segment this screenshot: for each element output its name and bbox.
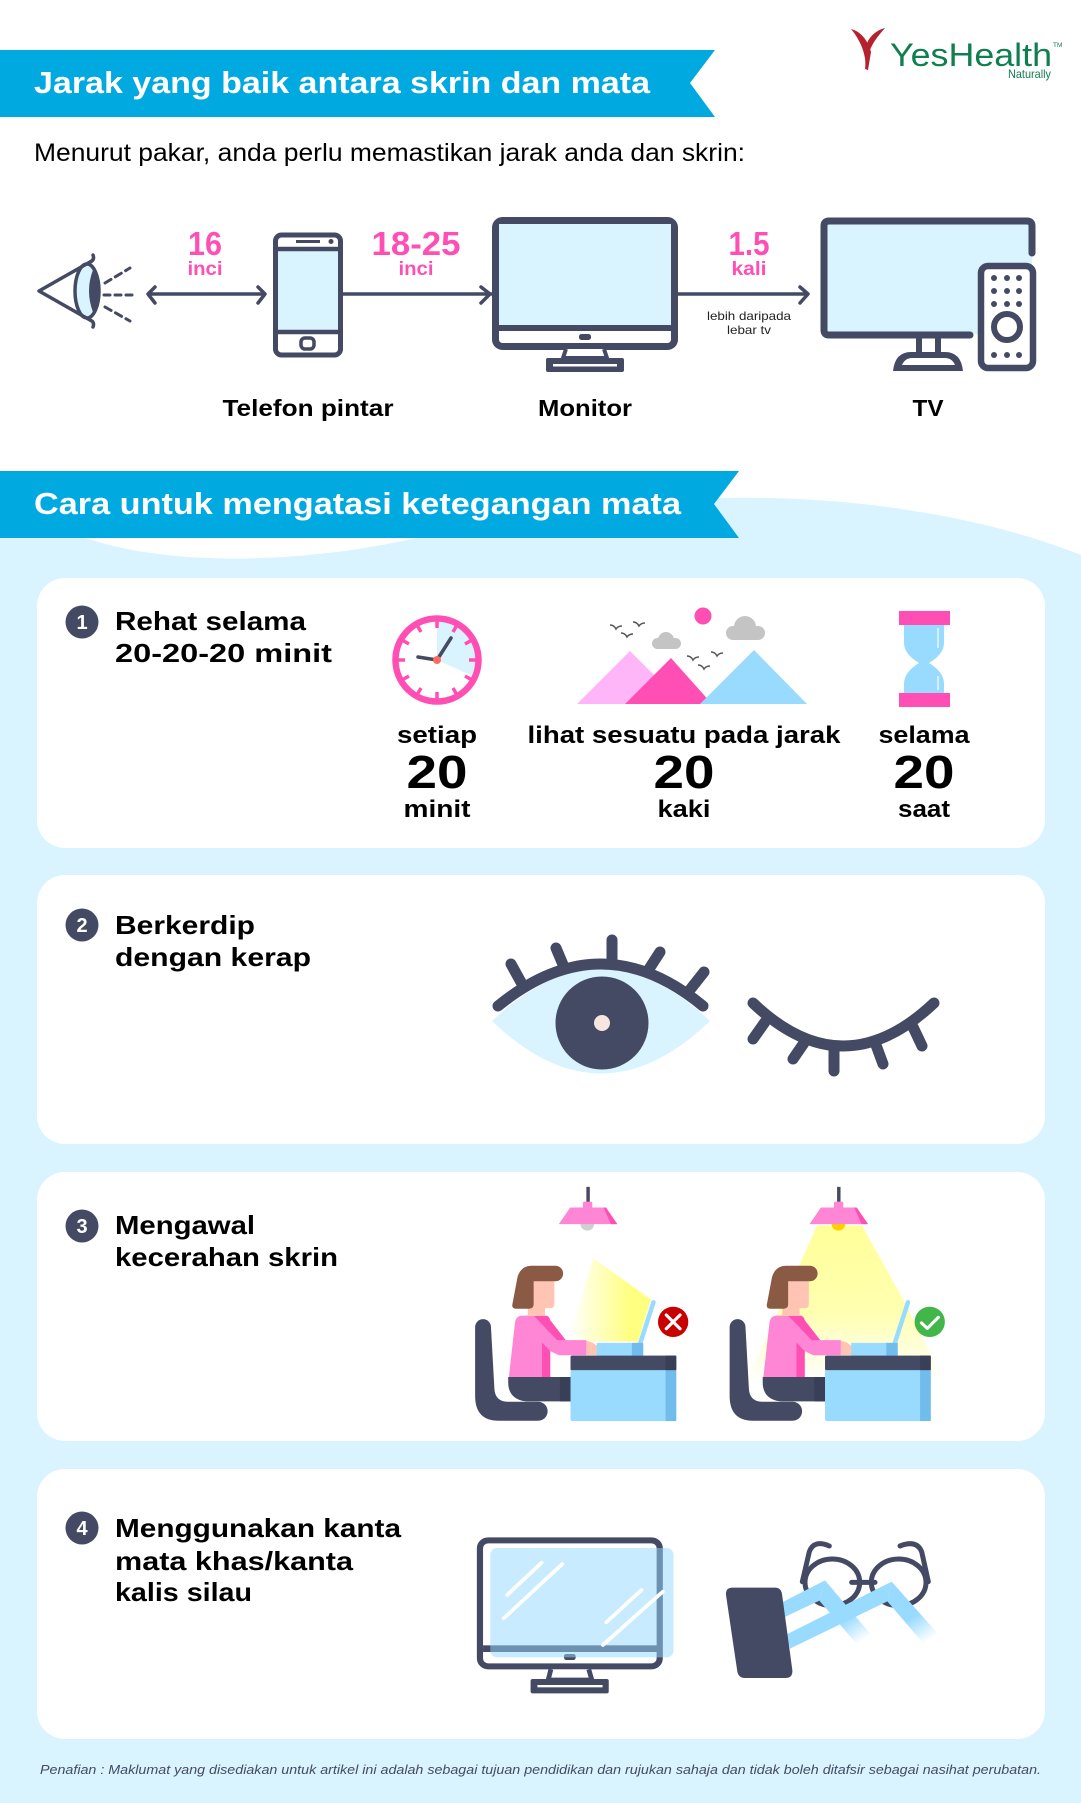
text: for 20 seconds (878, 722, 970, 823)
figure: person at desk (730, 1266, 856, 1421)
number badge 3 (66, 1210, 98, 1242)
number badge 1 (66, 606, 98, 638)
number badge 2: 2 (76, 915, 88, 937)
text: for 20 seconds: 20 (894, 746, 954, 798)
icon: closed eye (753, 1003, 934, 1071)
label: TV: TV (912, 395, 944, 421)
heading: tip 2: Berkerdip (115, 910, 255, 940)
illustration: glasses (726, 1544, 939, 1678)
label: 1.5 kali: 1.5 (728, 225, 770, 262)
heading: tip 1: 20-20-20 minit (115, 638, 332, 668)
banner: section 1 heading: Jarak yang baik antara skrin dan mata (34, 65, 651, 100)
illustration: correct lighting (730, 1187, 945, 1421)
text: for 20 seconds: saat (898, 796, 950, 823)
text: every 20 minutes: minit (404, 796, 471, 823)
banner: section 1 heading (0, 50, 715, 117)
heading: tip 4: Menggunakan kanta (115, 1513, 402, 1543)
note: wider than TV: lebar tv (727, 323, 771, 337)
label: 16 inci: 16 (188, 225, 222, 262)
panel: tip 1 (37, 578, 1045, 848)
icon: lamp on (810, 1187, 868, 1231)
icon: clock (396, 618, 479, 702)
heading: tip 2: dengan kerap (115, 942, 311, 972)
icon: phone (275, 235, 341, 355)
heading: tip 2 (115, 910, 311, 972)
background wave (0, 498, 1081, 1803)
text: look 20 feet away: lihat sesuatu pada jarak (528, 722, 841, 749)
heading: tip 4: mata khas/kanta (115, 1546, 354, 1576)
text: every 20 minutes: 20 (406, 746, 468, 798)
label: 16 inci (188, 225, 222, 280)
heading: tip 1: Rehat selama (115, 606, 307, 636)
icon: red leaves (851, 28, 885, 70)
number badge 3: 3 (76, 1216, 88, 1238)
panel: tip 3 (37, 1172, 1045, 1441)
icon: lamp off (559, 1187, 617, 1231)
icon: side eye (39, 255, 135, 327)
label: smartphone: Telefon pintar (222, 395, 394, 421)
icon: remote control (981, 266, 1033, 368)
text: for 20 seconds: selama (878, 722, 970, 749)
heading: tip 4 (115, 1513, 402, 1607)
figure: person at desk (475, 1266, 602, 1421)
number badge 1: 1 (76, 612, 88, 634)
heading: tip 3: kecerahan skrin (115, 1242, 338, 1272)
number badge 2 (66, 908, 98, 942)
disclaimer: Penafian : Maklumat yang disediakan untuk artikel ini adalah sebagai tujuan pendidikan dan rujukan sahaja dan tidak boleh ditafsir sebagai nasihat perubatan. (40, 1762, 1041, 1777)
banner: section 2 heading: Cara untuk mengatasi ketegangan mata (34, 486, 682, 521)
heading: tip 3 (115, 1210, 338, 1272)
logo: YesHealth: YesHealth (890, 37, 1052, 73)
diagram: viewing distances (39, 220, 1033, 421)
icon: hourglass (899, 611, 950, 707)
illustration: monitor with filter (480, 1540, 673, 1693)
label: 18-25 inci (372, 225, 460, 280)
text: every 20 minutes: setiap (397, 722, 477, 749)
text: every 20 minutes (397, 722, 477, 823)
lens block (726, 1588, 792, 1678)
light bands (783, 1580, 825, 1617)
logo: YesHealth: Naturally (1008, 67, 1051, 81)
icon: TV and remote (824, 221, 1033, 371)
icon: lamp light cone (747, 1225, 945, 1382)
arrow: monitor to TV (678, 287, 808, 303)
icon: screen glare (569, 1258, 651, 1342)
logo: YesHealth (851, 28, 1062, 81)
logo: YesHealth: TM (1053, 42, 1062, 49)
banner: section 2 heading (0, 471, 739, 538)
panel: tip 4 (37, 1469, 1045, 1739)
icon: monitor (494, 220, 676, 372)
label: 1.5 kali (728, 225, 770, 280)
label: 18-25 inci: inci (398, 259, 434, 280)
arrow: eye to phone (148, 287, 265, 303)
text: look 20 feet away (528, 722, 841, 823)
icon: open eye (492, 940, 710, 1074)
icon: mountains (577, 608, 807, 704)
label: 1.5 kali: kali (732, 259, 766, 280)
label: 16 inci: inci (188, 259, 222, 280)
icon: check mark (915, 1307, 945, 1337)
icon: laptop and desk (825, 1302, 931, 1421)
arrow: phone to monitor (342, 287, 491, 303)
anti-glare filter (490, 1548, 673, 1657)
icon: cross mark (658, 1307, 688, 1337)
note: wider than TV (707, 309, 791, 337)
heading: tip 4: kalis silau (115, 1577, 252, 1607)
label: 18-25 inci: 18-25 (372, 225, 460, 262)
heading: tip 3: Mengawal (115, 1210, 255, 1240)
number badge 4: 4 (76, 1518, 88, 1540)
illustration: wrong lighting (475, 1187, 688, 1421)
panel: tip 2 (37, 875, 1045, 1144)
text: look 20 feet away: kaki (658, 796, 710, 823)
intro text: Menurut pakar, anda perlu memastikan jarak anda dan skrin: (34, 139, 745, 167)
icon: laptop and desk (571, 1302, 676, 1421)
text: look 20 feet away: 20 (654, 746, 714, 798)
number badge 4 (66, 1512, 98, 1544)
note: wider than TV: lebih daripada (707, 309, 791, 323)
heading: tip 1 (115, 606, 332, 668)
label: monitor: Monitor (538, 395, 632, 421)
